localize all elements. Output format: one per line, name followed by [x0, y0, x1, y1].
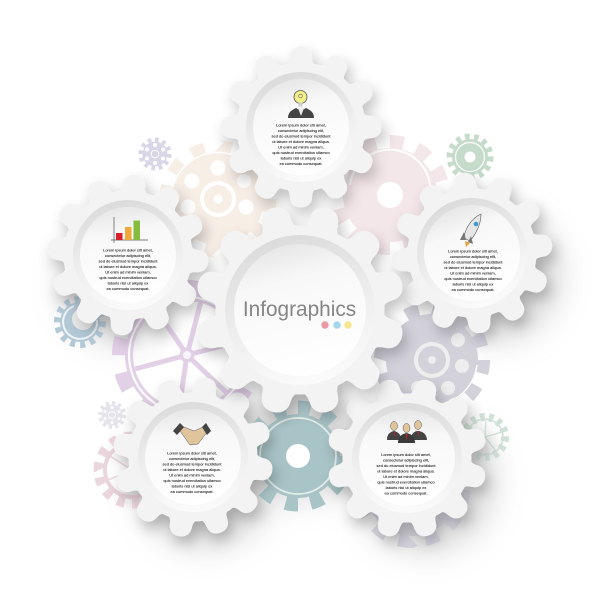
text: bottom right gear: ut labore et dolore magna aliqua.: [377, 468, 435, 474]
text: bottom right gear: Ut enim ad minim veniam,: [383, 474, 429, 479]
gear: centre: [171, 181, 429, 439]
text: top gear: sed do eiusmod tempor incididunt: [272, 134, 331, 138]
text: bottom right gear: consectetur adipiscing elit,: [383, 458, 429, 462]
text: right gear: laboris nisi ut aliquip ex: [453, 282, 493, 286]
text: bottom right gear: quis nostrud exercitation ullamco: [377, 480, 435, 484]
text: left gear: consectetur adipiscing elit,: [105, 253, 151, 258]
gear: top: [220, 46, 382, 208]
background gear: teal bottom: [251, 409, 345, 503]
gear: bottom left: [100, 364, 286, 550]
text: left gear: Lorem ipsum dolor sitt amet,: [103, 248, 153, 252]
decorative dots: [321, 321, 352, 329]
text: top gear: quis nostrud exercitation ullamco: [272, 150, 330, 155]
text: right gear: sed do eiusmod tempor incididunt: [444, 260, 503, 264]
background gear: pink bottom left: [99, 437, 165, 503]
text: left gear: laboris nisi ut aliquip ex: [108, 280, 148, 286]
icon: rocket: [460, 214, 481, 247]
text: left gear: sed do eiusmod tempor incididunt: [99, 258, 158, 264]
text: left gear: quis nostrud exercitation ullamco: [99, 275, 157, 280]
text: bottom left gear: ea commodo consequat.: [170, 489, 214, 494]
text: bottom left gear: consectetur adipiscing elit,: [169, 456, 215, 461]
background gear: peach: [167, 148, 269, 250]
centre hole: [234, 244, 366, 376]
background gear: pink: [338, 143, 442, 247]
background gear: grey right: [382, 310, 482, 410]
text: right gear: ea commodo consequat.: [451, 287, 495, 292]
centre ring: [225, 235, 375, 385]
text: bottom right gear: laboris nisi ut aliquip ex: [386, 485, 426, 490]
icon: bar chart: [111, 217, 148, 243]
background gear: green top right: [451, 138, 489, 176]
text: bottom right gear: Lorem ipsum dolor sitt amet,: [381, 452, 431, 457]
text: top gear: laboris nisi ut aliquip ex: [281, 156, 321, 160]
text: right gear: ut labore et dolore magna aliqua.: [444, 265, 502, 270]
text: bottom left gear: laboris nisi ut aliquip ex: [172, 484, 212, 488]
background gear: blue left: [59, 301, 101, 343]
text: bottom left gear: Ut enim ad minim veniam,: [169, 472, 215, 478]
text: bottom right gear: sed do eiusmod tempor incididunt: [377, 463, 436, 468]
gear: right: [384, 165, 560, 341]
text: right gear: Ut enim ad minim veniam,: [450, 270, 496, 276]
text: bottom left gear: sed do eiusmod tempor incididunt: [163, 462, 222, 466]
text: bottom left gear: Lorem ipsum dolor sitt amet,: [167, 450, 217, 456]
background gear: small lilac top left: [142, 141, 168, 167]
floor shadow: [62, 209, 561, 552]
background gear: grey bottom right: [362, 440, 462, 540]
text: left gear: ea commodo consequat.: [106, 286, 150, 291]
text: top gear: Ut enim ad minim veniam,: [278, 144, 324, 150]
text: left gear: Ut enim ad minim veniam,: [105, 270, 151, 274]
background gear: green bottom right: [465, 417, 505, 457]
text: right gear: consectetur adipiscing elit,: [450, 254, 496, 259]
text: bottom left gear: ut labore et dolore magna aliqua.: [163, 467, 221, 472]
icon: lightbulb businessman: [288, 90, 314, 118]
icon: three businessmen: [387, 420, 427, 443]
gear: left: [41, 168, 215, 342]
text: top gear: consectetur adipiscing elit,: [278, 128, 324, 133]
title: Infographics: [243, 298, 356, 321]
text: bottom left gear: quis nostrud exercitation ullamco: [163, 478, 221, 483]
text: left gear: ut labore et dolore magna aliqua.: [99, 264, 157, 269]
background gear: small lilac bottom left: [101, 404, 123, 426]
icon: handshake: [173, 423, 211, 445]
text: top gear: ea commodo consequat.: [279, 161, 323, 166]
text: top gear: Lorem ipsum dolor sitt amet,: [276, 122, 326, 128]
text: bottom right gear: ea commodo consequat.: [384, 490, 428, 496]
gear: bottom right: [308, 359, 506, 557]
text: right gear: quis nostrud exercitation ullamco: [444, 276, 502, 281]
text: right gear: Lorem ipsum dolor sitt amet,: [448, 248, 498, 254]
text: top gear: ut labore et dolore magna aliqua.: [272, 139, 330, 144]
background gear: purple: [120, 288, 254, 422]
